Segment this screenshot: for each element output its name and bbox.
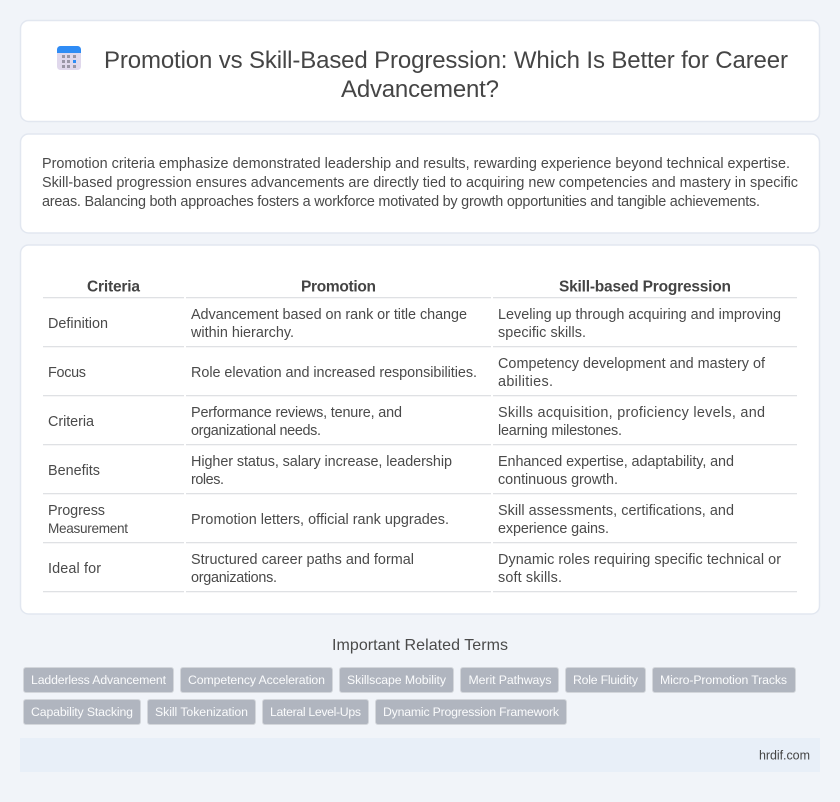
title (104, 47, 788, 103)
row: definition: Advancement based on rank or title change (191, 307, 467, 323)
row: progress measurement: Promotion letters, official rank upgrades. (191, 512, 449, 528)
tags: related terms: Ladderless Advancement (31, 673, 167, 687)
row: benefits (48, 454, 734, 488)
row: criteria: Criteria (48, 414, 94, 430)
row: progress measurement: Progress (48, 503, 105, 519)
row: ideal for: organizations. (191, 570, 277, 586)
tags: related terms: Lateral Level-Ups (270, 705, 361, 719)
row: progress measurement: Measurement (48, 521, 128, 536)
row: criteria: learning milestones. (498, 423, 622, 439)
row: benefits: Enhanced expertise, adaptability, and (498, 454, 734, 470)
icon: calendar (57, 46, 81, 70)
text block: summary: Skill-based progression ensures advancements are directly tied to acquiring new competencies and mastery in specific (42, 175, 798, 191)
row: definition: specific skills. (498, 325, 586, 341)
row: benefits: continuous growth. (498, 472, 618, 488)
panel: header (20, 20, 820, 122)
row: ideal for: soft skills. (498, 570, 562, 586)
row: progress measurement: experience gains. (498, 521, 609, 537)
table header: Promotion (301, 278, 376, 296)
table header: Skill-based Progression (559, 278, 731, 296)
row: definition (48, 307, 781, 341)
table header (87, 278, 731, 296)
panel: summary paragraph (20, 134, 820, 233)
row: ideal for: Structured career paths and formal (191, 552, 414, 568)
row: ideal for: Ideal for (48, 561, 101, 577)
text block: summary: areas. Balancing both approaches fosters a workforce motivated by growth opportunities and tangible achievements. (42, 194, 760, 210)
text block: summary: Promotion criteria emphasize demonstrated leadership and results, rewarding experience beyond technical expertise. (42, 156, 790, 172)
row: definition: Definition (48, 316, 108, 332)
row: ideal for: Dynamic roles requiring specific technical or (498, 552, 781, 568)
row: benefits: Higher status, salary increase, leadership (191, 454, 452, 470)
row: definition: Leveling up through acquiring and improving (498, 307, 781, 323)
tags: related terms: Dynamic Progression Framework (383, 705, 560, 719)
row: progress measurement: Skill assessments, certifications, and (498, 503, 734, 519)
row: focus: abilities. (498, 374, 553, 390)
row: focus: Role elevation and increased responsibilities. (191, 365, 477, 381)
tags: related terms: Skillscape Mobility (347, 673, 447, 687)
row: focus (48, 356, 766, 390)
row: progress measurement (48, 503, 734, 537)
row: criteria: organizational needs. (191, 423, 321, 439)
row: criteria: Skills acquisition, proficiency levels, and (498, 405, 765, 421)
text block: summary (42, 156, 798, 210)
footer (20, 738, 820, 772)
tags: related terms: Capability Stacking (31, 705, 133, 719)
row: ideal for (48, 552, 781, 586)
footer: hrdif.com (759, 748, 810, 762)
table header: Criteria (87, 278, 140, 296)
tags: related terms: Micro-Promotion Tracks (660, 673, 787, 687)
tags: related terms (24, 668, 796, 724)
title: Advancement? (341, 76, 499, 103)
row: focus: Focus (48, 365, 86, 381)
tags: related terms: Role Fluidity (573, 673, 639, 687)
tags: related terms: Competency Acceleration (188, 673, 325, 687)
tags: related terms: Merit Pathways (468, 673, 552, 687)
panel: comparison table (20, 245, 820, 614)
title: Promotion vs Skill-Based Progression: Which Is Better for Career (104, 47, 788, 74)
row: definition: within hierarchy. (190, 325, 294, 341)
row: benefits: roles. (191, 472, 224, 488)
heading: important related terms: Important Related Terms (332, 637, 508, 654)
row: criteria (48, 405, 765, 439)
tags: related terms: Skill Tokenization (155, 705, 248, 719)
row: criteria: Performance reviews, tenure, and (191, 405, 402, 421)
row: benefits: Benefits (48, 463, 100, 479)
row: focus: Competency development and mastery of (498, 356, 766, 372)
